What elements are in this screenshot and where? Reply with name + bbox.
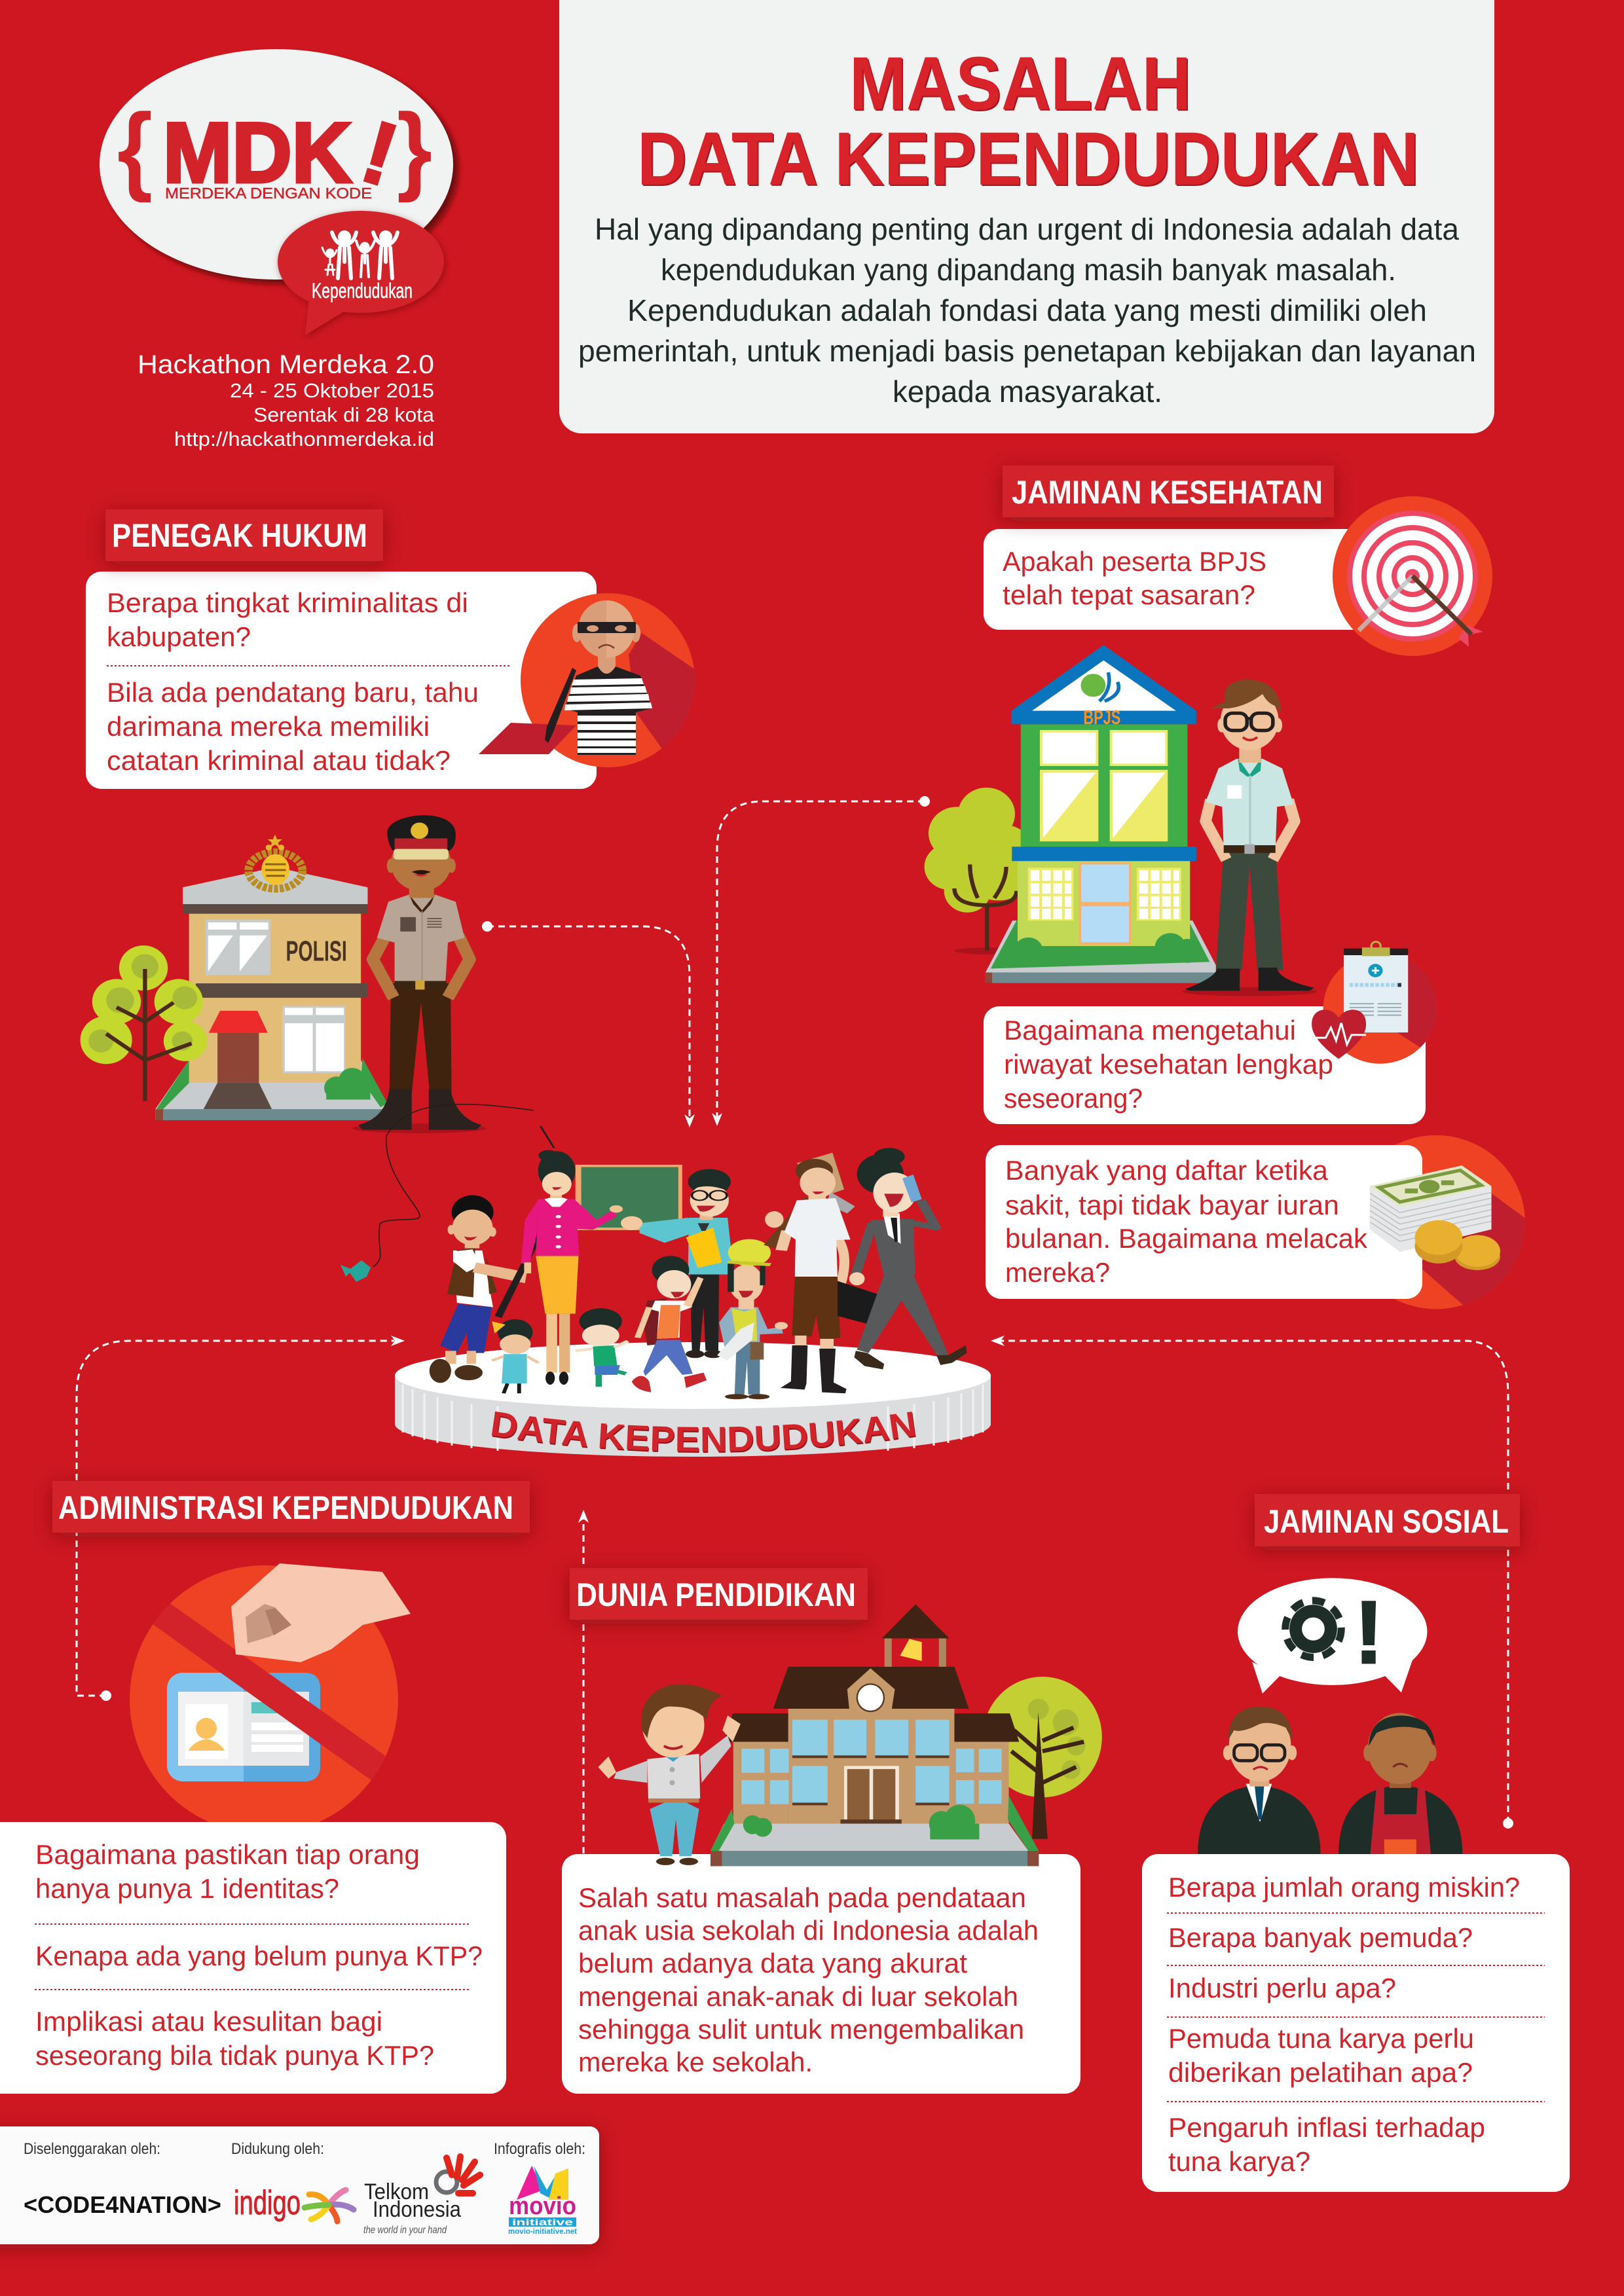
panel: jaminan kesehatan question 2: riwayat kesehatan lengkap <box>1004 1049 1333 1080</box>
label: dunia pendidikan: DUNIA PENDIDIKAN <box>576 1576 856 1613</box>
illustration: BPJS office and employee <box>925 645 1317 996</box>
logo: telkom indonesia: Indonesia <box>373 2197 461 2222</box>
event info: Hackathon Merdeka 2.0 <box>138 350 434 379</box>
illustration: fishing line with fish <box>341 1104 534 1282</box>
title: DATA KEPENDUDUKAN <box>637 117 1419 201</box>
panel: dunia pendidikan text: belum adanya data yang akurat <box>578 1948 967 1978</box>
logo: MDK merdeka dengan kode: ! <box>352 101 409 205</box>
logo: movio initiative <box>508 2166 577 2236</box>
icon: medical record <box>1309 941 1444 1064</box>
panel: administrasi kependudukan questions: seseorang bila tidak punya KTP? <box>35 2040 434 2071</box>
panel: administrasi kependudukan questions <box>0 1822 506 2094</box>
platform: data kependudukan <box>395 1342 991 1457</box>
panel: penegak hukum questions: darimana mereka memiliki <box>107 711 430 742</box>
panel: jaminan sosial questions: Industri perlu apa? <box>1168 1973 1396 2003</box>
illustration: BPJS office and employee: BPJS <box>1083 706 1120 729</box>
illustration: police station and officer <box>81 815 487 1133</box>
panel: dunia pendidikan text: mereka ke sekolah. <box>578 2047 813 2077</box>
title <box>637 42 1419 201</box>
panel: dunia pendidikan text: anak usia sekolah di Indonesia adalah <box>578 1915 1039 1946</box>
logo: movio initiative: movio-initiative.net <box>508 2227 577 2236</box>
label: dunia pendidikan <box>570 1568 868 1620</box>
logo: MDK merdeka dengan kode: MDK <box>163 105 352 200</box>
label: penegak hukum <box>105 509 383 561</box>
person: construction worker <box>717 1239 788 1399</box>
label: administrasi kependudukan <box>52 1481 530 1533</box>
speech bubble with gear: ! <box>1354 1582 1384 1682</box>
panel: penegak hukum questions <box>86 572 597 789</box>
panel: jaminan kesehatan question 3: mereka? <box>1005 1257 1110 1288</box>
panel: jaminan sosial questions: Berapa banyak pemuda? <box>1168 1922 1473 1953</box>
label: administrasi kependudukan: ADMINISTRASI KEPENDUDUKAN <box>58 1489 513 1526</box>
platform: data kependudukan: DATA KEPENDUDUKAN <box>491 1412 916 1453</box>
person: toddler boy <box>576 1308 628 1387</box>
panel: jaminan kesehatan question 1: telah tepat sasaran? <box>1003 579 1255 610</box>
logo: movio initiative: movio <box>509 2193 576 2220</box>
person: man in suit <box>1198 1707 1321 1854</box>
person: little girl <box>492 1319 538 1393</box>
intro text <box>578 212 1476 409</box>
icon: target <box>1333 496 1492 656</box>
label: jaminan kesehatan: JAMINAN KESEHATAN <box>1012 474 1323 511</box>
intro text: Kependudukan adalah fondasi data yang mesti dimiliki oleh <box>627 293 1427 327</box>
intro text: Hal yang dipandang penting dan urgent di Indonesia adalah data <box>595 212 1459 246</box>
panel: jaminan kesehatan question 2: seseorang? <box>1004 1083 1143 1114</box>
panel: administrasi kependudukan questions: hanya punya 1 identitas? <box>35 1873 339 1904</box>
logo: MDK merdeka dengan kode <box>100 49 458 335</box>
panel: jaminan sosial questions: Pemuda tuna karya perlu <box>1168 2023 1474 2054</box>
logo: telkom indonesia: the world in your hand <box>363 2225 447 2236</box>
panel: title and intro <box>559 0 1494 433</box>
logo: code4nation: <CODE4NATION> <box>24 2191 221 2218</box>
label: penegak hukum: PENEGAK HUKUM <box>112 517 367 554</box>
panel: jaminan kesehatan question 3: Banyak yang daftar ketika <box>1005 1155 1329 1186</box>
panel: dunia pendidikan text: mengenai anak-anak di luar sekolah <box>578 1981 1018 2012</box>
panel: jaminan kesehatan question 1 <box>984 529 1370 630</box>
panel: dunia pendidikan text: Salah satu masalah pada pendataan <box>578 1882 1026 1913</box>
panel: penegak hukum questions: Berapa tingkat kriminalitas di <box>107 587 468 618</box>
panel: penegak hukum questions: catatan kriminal atau tidak? <box>107 745 451 776</box>
panel: jaminan kesehatan question 2 <box>984 941 1444 1124</box>
illustration: two people with speech bubble <box>1198 1578 1462 1854</box>
event info <box>138 350 435 450</box>
illustration: teacher boy <box>598 1685 741 1865</box>
panel: footer sponsors: Didukung oleh: <box>231 2140 324 2158</box>
panel: jaminan kesehatan question 1: Apakah peserta BPJS <box>1003 546 1266 577</box>
panel: footer sponsors: Diselenggarakan oleh: <box>24 2140 160 2158</box>
person: worker in apron <box>1338 1713 1462 1854</box>
event info: Serentak di 28 kota <box>253 403 435 426</box>
intro text: kepada masyarakat. <box>893 374 1162 409</box>
panel: jaminan kesehatan question 3 <box>986 1135 1537 1313</box>
logo: movio initiative: initiative <box>512 2217 573 2227</box>
panel: penegak hukum questions: Bila ada pendatang baru, tahu <box>107 677 479 708</box>
person: businessman <box>838 1148 967 1370</box>
logo: MDK merdeka dengan kode: { <box>117 93 153 203</box>
illustration: citizens group <box>430 1126 967 1399</box>
logo: telkom indonesia <box>363 2157 480 2236</box>
icon: no ID card <box>130 1563 411 1834</box>
icon: thief <box>479 593 704 767</box>
event info: http://hackathonmerdeka.id <box>174 428 434 450</box>
logo: MDK merdeka dengan kode: MERDEKA DENGAN KODE <box>165 185 372 202</box>
panel: jaminan kesehatan question 2: Bagaimana mengetahui <box>1004 1015 1296 1046</box>
illustration: police station and officer: POLISI <box>286 935 347 967</box>
illustration: school <box>710 1604 1102 1866</box>
panel: jaminan sosial questions: tuna karya? <box>1168 2146 1310 2177</box>
panel: jaminan sosial questions: diberikan pelatihan apa? <box>1168 2057 1473 2088</box>
logo: MDK merdeka dengan kode: } <box>397 93 432 203</box>
panel: penegak hukum questions: kabupaten? <box>107 621 251 652</box>
person: farmer <box>764 1153 855 1393</box>
label: jaminan sosial: JAMINAN SOSIAL <box>1264 1503 1509 1540</box>
event info: 24 - 25 Oktober 2015 <box>230 379 434 402</box>
title: MASALAH <box>849 42 1191 126</box>
panel: administrasi kependudukan questions: Kenapa ada yang belum punya KTP? <box>35 1941 483 1971</box>
speech bubble with gear <box>1238 1578 1427 1694</box>
panel: jaminan kesehatan question 3: bulanan. Bagaimana melacak <box>1005 1223 1368 1254</box>
panel: jaminan sosial questions: Berapa jumlah orang miskin? <box>1168 1872 1520 1903</box>
panel: jaminan kesehatan question 3: sakit, tapi tidak bayar iuran <box>1005 1190 1339 1220</box>
panel: dunia pendidikan text <box>562 1854 1080 2094</box>
logo: indigo: indigo <box>234 2184 301 2222</box>
person: schoolboy <box>632 1256 707 1393</box>
intro text: pemerintah, untuk menjadi basis penetapan kebijakan dan layanan <box>578 334 1476 368</box>
logo: telkom indonesia: Telkom <box>364 2179 429 2204</box>
panel: jaminan sosial questions <box>1142 1854 1570 2192</box>
person: man with glasses <box>621 1169 734 1358</box>
connector arrows <box>77 796 1513 1853</box>
intro text: kependudukan yang dipandang masih banyak masalah. <box>661 253 1396 287</box>
panel: jaminan sosial questions: Pengaruh inflasi terhadap <box>1168 2112 1485 2143</box>
panel: dunia pendidikan text: sehingga sulit untuk mengembalikan <box>578 2014 1024 2045</box>
logo: MDK merdeka dengan kode: Kependudukan <box>312 279 413 302</box>
chalkboard <box>576 1165 682 1230</box>
icon: money and coins <box>1370 1165 1500 1270</box>
label: jaminan kesehatan <box>1003 465 1334 517</box>
panel: footer sponsors: Infografis oleh: <box>494 2140 585 2158</box>
person: boy with vest <box>430 1195 542 1383</box>
panel: footer sponsors <box>0 2126 599 2244</box>
label: jaminan sosial <box>1255 1494 1520 1546</box>
panel: administrasi kependudukan questions: Implikasi atau kesulitan bagi <box>35 2006 382 2037</box>
person: teacher <box>521 1150 623 1385</box>
panel: administrasi kependudukan questions: Bagaimana pastikan tiap orang <box>35 1839 420 1870</box>
